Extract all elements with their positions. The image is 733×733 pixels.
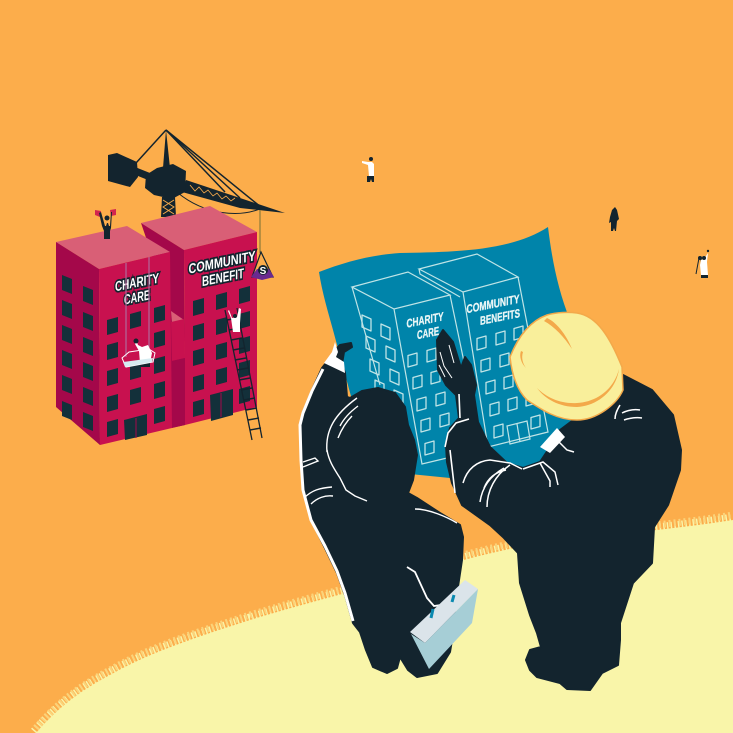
hand highlights [439,345,454,378]
sleeve wrinkle highlights [463,405,642,507]
crane mast [163,130,170,168]
outline highlight [300,369,353,621]
window cleaner platform [122,257,155,367]
sign: community benefit [188,247,256,289]
side wall [141,223,185,428]
sign: community benefit: COMMUNITY [188,247,256,277]
grassy hill [36,515,733,733]
front wall [99,252,172,445]
body silhouette [437,330,681,690]
blueprint sheet [319,227,590,478]
sign: charity care: CHARITY [115,270,159,294]
cuff [540,428,565,453]
front windows [107,305,165,437]
building: community benefit tower [141,206,257,428]
blueprint labels [406,292,520,342]
figure: man with briefcase [300,342,463,677]
hat ridge [544,318,572,349]
hanging money bag: S [260,266,267,277]
door [124,414,147,440]
blueprint: community tower [419,254,548,447]
crane [108,130,285,217]
sign: charity care: CARE [124,287,150,308]
distant figure: white coat [362,157,374,182]
crane jib [133,167,285,213]
blueprint labels: BENEFITS [480,306,520,328]
crane cabin [145,164,186,199]
windows [193,286,250,417]
door [210,389,233,421]
figure: man in hard hat [437,330,681,690]
crane counterweight [108,153,138,187]
sign: charity care [115,270,159,308]
blueprint labels: CARE [417,324,439,342]
front wall [184,232,257,425]
side wall [56,242,100,445]
arm highlight [445,394,469,493]
hair and sleeve highlights [303,398,457,606]
distant figure: dark silhouette [609,207,619,231]
hanging money bag [251,210,274,280]
blueprint labels: CHARITY [406,309,444,331]
ladder with worker [225,308,262,440]
briefcase [410,580,478,669]
building: charity care tower [56,226,172,445]
crane cables [136,130,262,213]
sign: community benefit: BENEFIT [202,265,244,289]
roof [56,226,170,269]
roof [141,206,257,250]
hard hat [510,312,623,420]
blueprint windows [362,315,540,455]
cuff [324,342,345,373]
blueprint: charity care tower [352,272,472,464]
body silhouette [300,343,463,677]
crane tower [161,197,176,217]
blueprint labels: COMMUNITY [466,292,520,316]
distant figure: surveyor [696,250,709,278]
side windows [62,275,93,431]
connector between towers [171,311,185,428]
worker: flag signaller on roof [95,209,116,239]
hat brim line [537,369,619,407]
